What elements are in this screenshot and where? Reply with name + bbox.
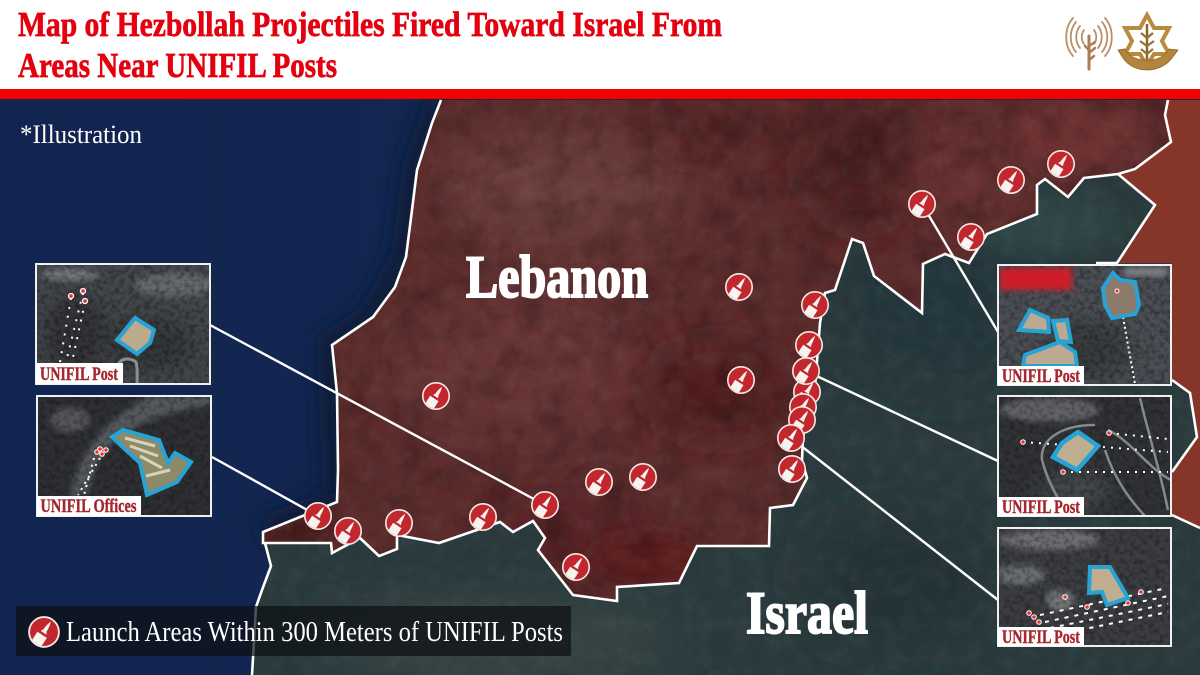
inset: UNIFIL Post (left) xyxy=(36,264,215,385)
border lines xyxy=(252,100,1200,675)
caption: UNIFIL Post xyxy=(1002,497,1080,518)
caption: UNIFIL Post xyxy=(1002,627,1080,648)
Syria side shading xyxy=(1117,100,1200,528)
Lebanon land xyxy=(260,100,1180,610)
inset: UNIFIL Post (middle right) xyxy=(998,396,1171,518)
caption: UNIFIL Offices xyxy=(40,496,136,517)
header band xyxy=(0,0,1200,99)
leader lines xyxy=(210,204,998,600)
legend text: Launch Areas Within 300 Meters of UNIFIL Posts xyxy=(66,617,563,648)
coastal shading xyxy=(263,100,441,532)
inset: UNIFIL Post (bottom right) xyxy=(995,528,1171,648)
icon: IDF emblem xyxy=(1118,15,1178,70)
title: Map of Hezbollah Projectiles Fired Toward Israel From xyxy=(18,5,722,44)
note: illustration: *Illustration xyxy=(20,120,142,149)
caption: UNIFIL Post xyxy=(1002,366,1080,387)
caption: UNIFIL Post xyxy=(40,364,118,385)
icon: antenna emblem xyxy=(1066,18,1112,69)
legend xyxy=(16,606,571,656)
label: Lebanon: Lebanon xyxy=(466,244,648,310)
Israel land xyxy=(250,170,1200,675)
inset: UNIFIL Offices xyxy=(37,396,211,517)
inset: UNIFIL Post (top right) xyxy=(998,265,1171,387)
legend icon xyxy=(29,617,59,647)
launch area markers xyxy=(305,151,1074,580)
title: Areas Near UNIFIL Posts xyxy=(18,46,337,85)
label: Israel: Israel xyxy=(746,580,868,646)
title xyxy=(18,5,722,85)
